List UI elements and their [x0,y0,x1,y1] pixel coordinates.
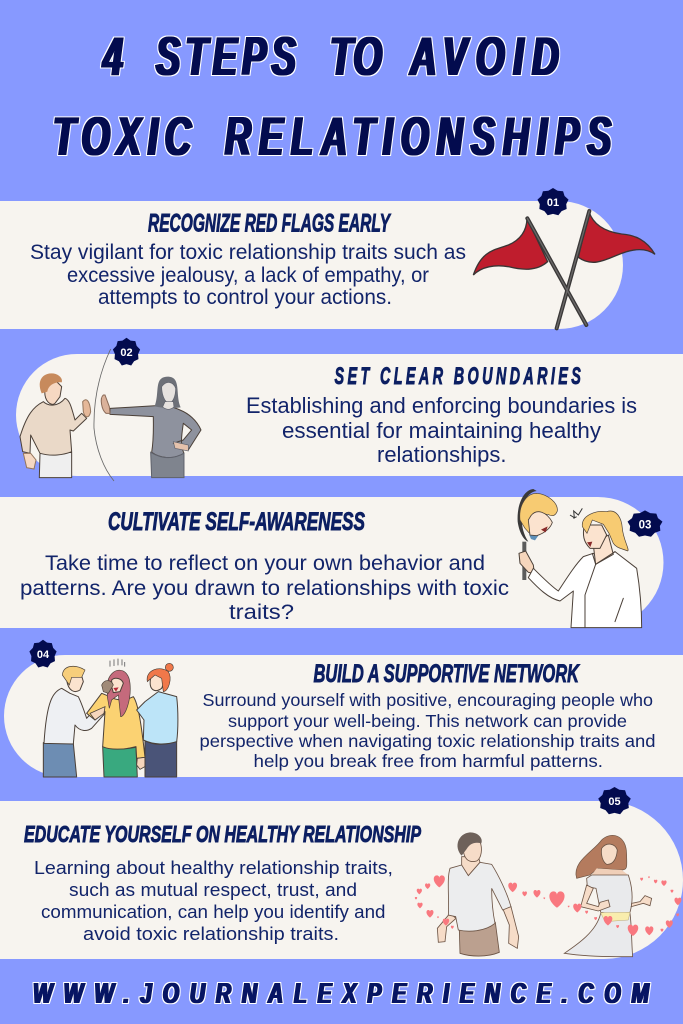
heading: step 1: RECOGNIZE RED FLAGS EARLY [148,210,391,238]
text block: step 2: essential for maintaining healthy [282,418,601,443]
badge 05 [598,787,631,814]
badge 05: 05 [608,796,621,808]
panel: step 2 set clear boundaries [16,338,683,481]
badge 03: 03 [639,520,651,532]
text block: step 2: Establishing and enforcing boundaries is [246,393,637,418]
badge 02: 02 [120,347,133,359]
text block: step 1: attempts to control your actions. [98,286,392,309]
illustration: happy couple with hearts [415,832,681,957]
text block: step 5: Learning about healthy relationship traits, [34,857,393,878]
illustration: woman looking in mirror [518,489,642,628]
text block: step 4: Surround yourself with positive, encouraging people who [202,690,653,710]
badge 04 [29,640,57,667]
panel: step 1 recognize red flags [0,188,655,329]
text block: step 5: such as mutual respect, trust, and [69,879,357,900]
panel: step 4 build a supportive network [4,640,683,777]
badge 04: 04 [37,649,50,661]
text block: step 4: support your well-being. This network can provide [228,711,627,731]
badge 01 [537,188,569,215]
heading: step 5: EDUCATE YOURSELF ON HEALTHY RELATIONSHIP [24,821,421,847]
text block: step 5: avoid toxic relationship traits. [83,923,339,944]
title: TOXIC [53,105,198,167]
title [53,25,619,167]
text block: step 2: relationships. [377,442,506,467]
title: STEPS [156,25,301,87]
icon: crossed red flags [473,211,655,328]
text block: step 5 [34,857,393,944]
text block: step 4: help you break free from harmful patterns. [254,751,603,771]
text block: step 3: patterns. Are you drawn to relationships with toxic [20,576,509,600]
badge 02 [113,338,140,365]
illustration: man and woman with boundary line [20,349,201,481]
illustration: friends supporting a crying woman [43,659,178,777]
title: AVOID [409,25,568,87]
title: 4 [102,25,123,87]
text block: step 3: traits? [229,600,294,624]
text block: step 1 [30,241,466,309]
text block: step 5: communication, can help you identify and [41,901,386,922]
panel: step 5 educate yourself [0,787,683,959]
decorative hearts [415,875,681,936]
text block: step 4: perspective when navigating toxic relationship traits and [200,731,656,751]
text block: step 1: Stay vigilant for toxic relationship traits such as [30,241,466,264]
text block: step 3 [20,551,509,624]
panel: step 3 cultivate self-awareness [0,489,664,628]
badge 01: 01 [547,197,559,209]
badge 03 [628,510,662,537]
text block: step 1: excessive jealousy, a lack of empathy, or [67,264,429,287]
text block: step 3: Take time to reflect on your own behavior and [45,551,485,575]
title: TO [330,25,384,87]
heading: step 3: CULTIVATE SELF-AWARENESS [108,508,365,536]
text block: step 4 [200,690,656,771]
text block: step 2 [246,393,637,467]
